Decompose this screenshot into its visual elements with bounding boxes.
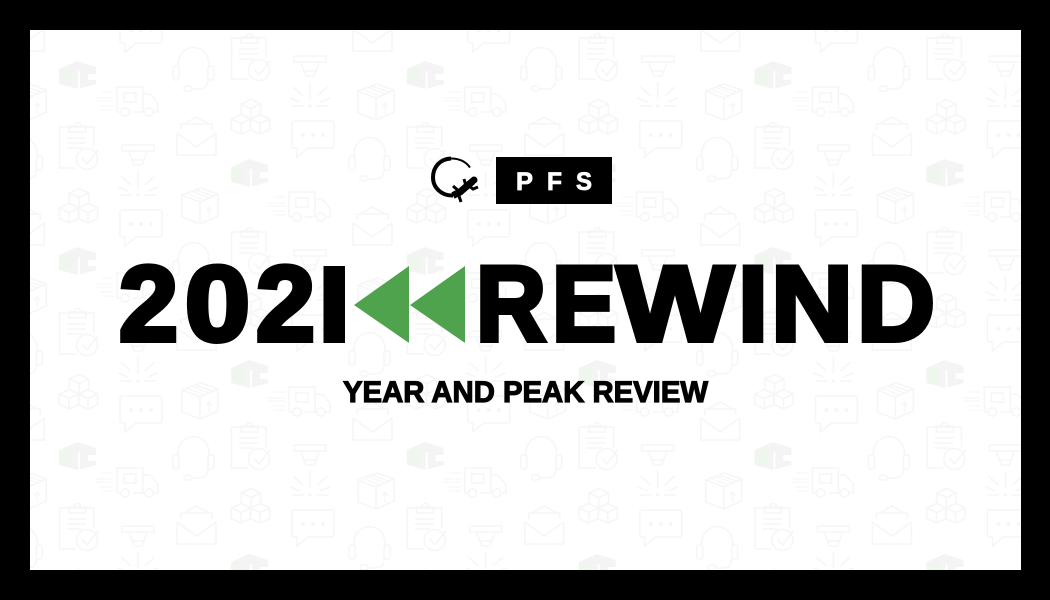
icon: rewind arrows xyxy=(354,266,465,343)
title: REWIND: D xyxy=(857,244,935,364)
logo: PFS badge: S xyxy=(576,168,592,196)
title: 2021: 2 xyxy=(256,244,315,364)
title: REWIND: E xyxy=(552,244,616,364)
text: 1 xyxy=(325,251,343,363)
title: 2021: 0 xyxy=(185,244,250,364)
logo: PFS badge: P xyxy=(516,168,533,196)
title: REWIND xyxy=(476,244,935,364)
subtitle: YEAR AND PEAK REVIEW xyxy=(343,376,709,409)
title: REWIND: R xyxy=(476,244,546,364)
logo: PFS badge: F xyxy=(547,168,562,196)
title: REWIND: I xyxy=(738,244,768,364)
title: REWIND: W xyxy=(617,244,733,364)
title: 2021 xyxy=(119,244,345,364)
logo: PFS badge xyxy=(496,157,612,204)
logo: gecko ring xyxy=(433,158,478,202)
title: REWIND: N xyxy=(771,244,853,364)
title: 2021: 2 xyxy=(119,244,178,364)
